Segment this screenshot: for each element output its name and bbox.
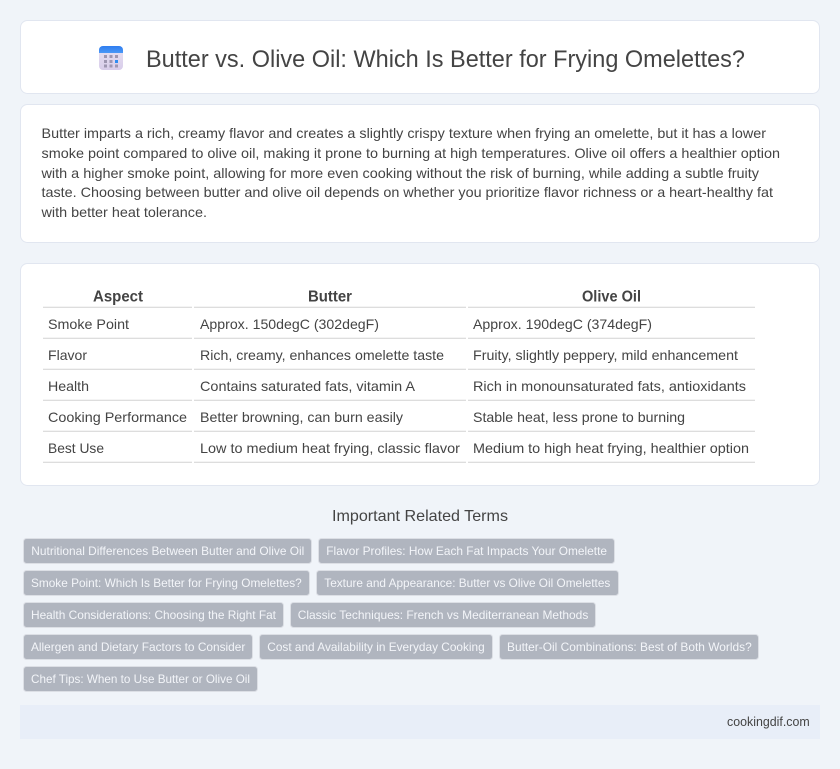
panel: summary paragraph (20, 104, 820, 242)
table row: smoke point: Approx. 190degC (374degF) (473, 316, 652, 332)
heading: related terms: Important Related Terms (332, 508, 508, 525)
tag (290, 602, 596, 628)
tag: Flavor Profiles: How Each Fat Impacts Your Omelette (326, 544, 607, 558)
tag (500, 634, 758, 660)
text block: summary: with better heat tolerance. (40, 204, 207, 220)
table row: smoke point: Smoke Point (48, 316, 129, 332)
title: Butter vs. Olive Oil: Which Is Better for Frying Omelettes? (146, 46, 745, 73)
tag: Texture and Appearance: Butter vs Olive Oil Omelettes (324, 576, 610, 590)
table row: cooking performance: Cooking Performance (48, 409, 187, 425)
text block: summary: taste. Choosing between butter and olive oil depends on whether you prioritize flavor richness or a heart-healthy fat (42, 184, 773, 200)
table row: cooking performance: Better browning, can burn easily (200, 409, 403, 425)
table row: best use: Low to medium heat frying, classic flavor (200, 440, 460, 456)
tag: Allergen and Dietary Factors to Consider (31, 640, 245, 654)
tag (260, 634, 492, 660)
table row: health (48, 378, 746, 394)
tag: Cost and Availability in Everyday Cooking (267, 640, 485, 654)
table row: health: Contains saturated fats, vitamin A (200, 378, 416, 394)
tag: Health Considerations: Choosing the Right Fat (31, 608, 277, 622)
tag (24, 666, 258, 692)
tag: Nutritional Differences Between Butter and Olive Oil (31, 544, 304, 558)
table header row (93, 288, 641, 306)
table header row: Olive Oil (582, 288, 641, 306)
text block: summary: smoke point compared to olive oil, making it prone to burning at high temperatures. Olive oil offers a healthier option (42, 145, 780, 161)
table row: best use: Best Use (48, 440, 104, 456)
footer (20, 705, 820, 739)
panel: header (20, 20, 820, 94)
table row: flavor (48, 347, 738, 363)
tag (24, 570, 310, 596)
table row: cooking performance (48, 409, 685, 425)
table row: best use: Medium to high heat frying, healthier option (473, 440, 749, 456)
table row: smoke point: Approx. 150degC (302degF) (200, 316, 379, 332)
text block: summary: with a higher smoke point, allowing for more even cooking without the risk of burning, while adding a subtle fruity (40, 165, 759, 181)
tag: Chef Tips: When to Use Butter or Olive Oil (31, 672, 250, 686)
tag (316, 570, 618, 596)
text block: summary: Butter imparts a rich, creamy flavor and creates a slightly crispy texture when frying an omelette, but it has a lower (42, 125, 766, 141)
table row: flavor: Fruity, slightly peppery, mild enhancement (473, 347, 738, 363)
tag: Butter-Oil Combinations: Best of Both Worlds? (507, 640, 752, 654)
table header row: Butter (308, 288, 352, 306)
tag (24, 538, 312, 564)
footer source text: cookingdif.com (727, 715, 810, 729)
table row: health: Rich in monounsaturated fats, antioxidants (473, 378, 746, 394)
icon: calendar (99, 46, 123, 70)
tag (24, 602, 284, 628)
panel: comparison table (20, 264, 820, 486)
table header row: Aspect (93, 288, 144, 306)
table row: smoke point (48, 316, 652, 332)
tag (24, 634, 252, 660)
tag (318, 538, 614, 564)
text block: summary (40, 125, 780, 220)
table row: best use (48, 440, 749, 456)
table row: cooking performance: Stable heat, less prone to burning (473, 409, 685, 425)
tag: Smoke Point: Which Is Better for Frying Omelettes? (31, 576, 302, 590)
table row: flavor: Rich, creamy, enhances omelette taste (200, 347, 444, 363)
table row: health: Health (48, 378, 89, 394)
tag: Classic Techniques: French vs Mediterranean Methods (298, 608, 588, 622)
table row: flavor: Flavor (48, 347, 87, 363)
panel: related term tags (24, 538, 758, 692)
